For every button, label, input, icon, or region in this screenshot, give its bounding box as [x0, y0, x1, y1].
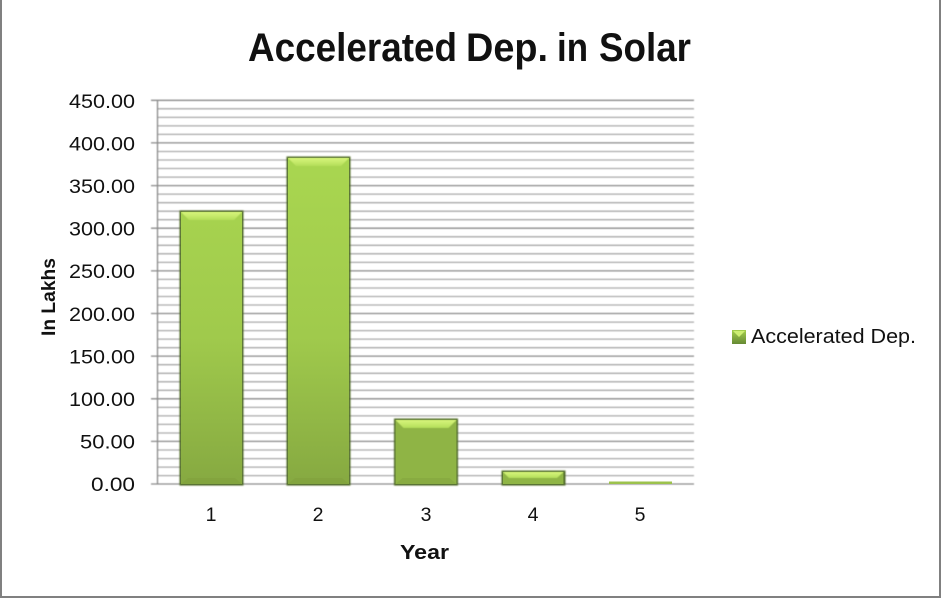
x axis labels [206, 504, 646, 526]
title: in [557, 26, 588, 70]
title [248, 26, 691, 70]
x axis labels: 2 [313, 504, 323, 526]
y axis labels: 250.00 [69, 261, 135, 283]
bar: year 4 [502, 470, 566, 486]
bar: year 1 [180, 210, 244, 486]
y axis labels: 400.00 [69, 134, 135, 156]
y axis labels: 150.00 [69, 346, 135, 368]
x axis labels: 1 [206, 504, 216, 526]
x axis labels: 3 [421, 504, 431, 526]
y axis labels: 200.00 [69, 304, 135, 326]
y axis labels: 350.00 [69, 176, 135, 198]
y axis labels: 300.00 [69, 218, 135, 240]
legend swatch [732, 330, 746, 344]
x axis labels: 4 [528, 504, 539, 526]
legend [732, 326, 916, 348]
y axis labels: 0.00 [91, 474, 135, 496]
y axis labels: 100.00 [69, 389, 135, 411]
y axis labels: 450.00 [69, 91, 135, 113]
y axis labels: 50.00 [80, 432, 135, 454]
bar: year 2 [286, 156, 350, 486]
title: Accelerated [248, 26, 457, 70]
bar: year 3 [394, 418, 458, 486]
y axis labels [69, 91, 135, 496]
bars [180, 156, 672, 486]
x axis labels: 5 [635, 504, 646, 526]
legend label: Accelerated Dep. [751, 326, 916, 348]
title: Solar [599, 26, 691, 70]
gridlines and axes [151, 100, 694, 484]
y axis title: In Lakhs [38, 258, 60, 336]
bar: year 5 [609, 482, 672, 484]
title: Dep. [466, 26, 548, 70]
x axis title: Year [400, 542, 449, 564]
